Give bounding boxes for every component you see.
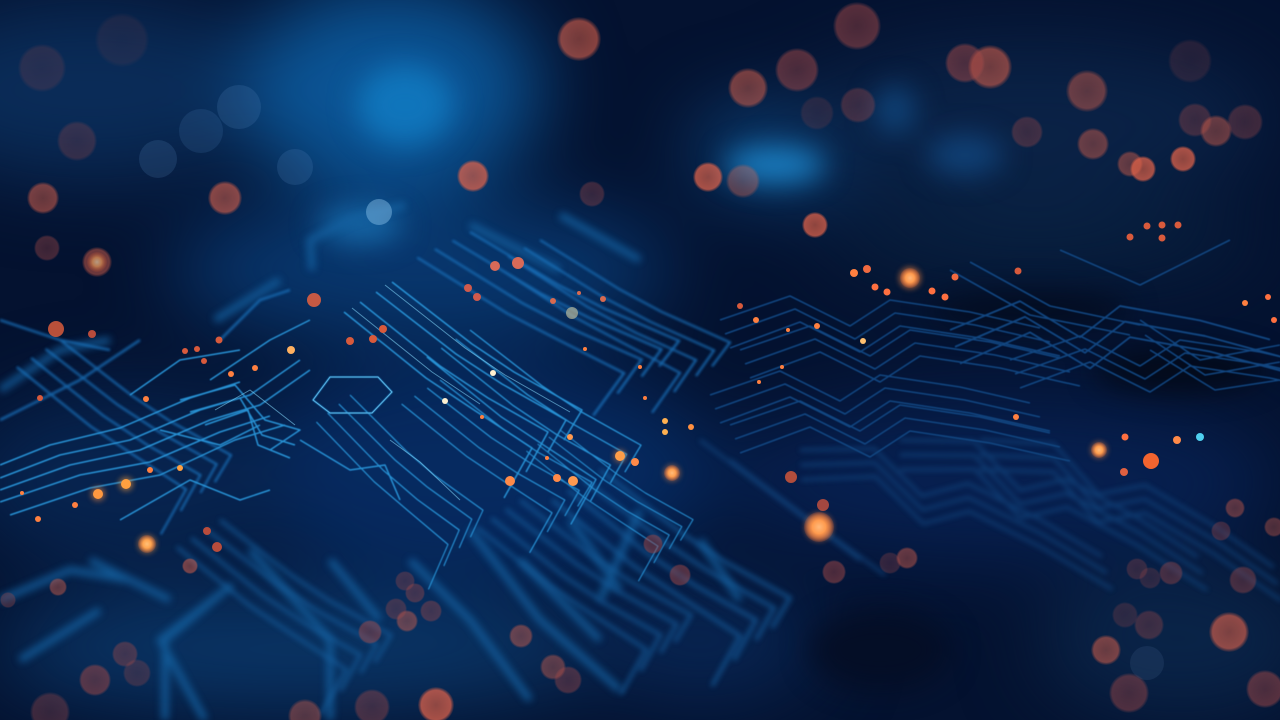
circuit traces: sharp centre bundles — [0, 282, 693, 589]
circuit traces: blurred foreground — [0, 205, 740, 720]
glowing orange nodes — [20, 222, 1277, 553]
circuit traces: lower soft bundles — [177, 470, 790, 714]
circuit traces: mid-focus bundles — [0, 232, 730, 534]
circuit traces: right side lower soft bundles — [700, 417, 1280, 601]
circuit traces: right side dim bundles — [710, 240, 1280, 461]
soft glow over brightest lights — [91, 267, 1107, 553]
